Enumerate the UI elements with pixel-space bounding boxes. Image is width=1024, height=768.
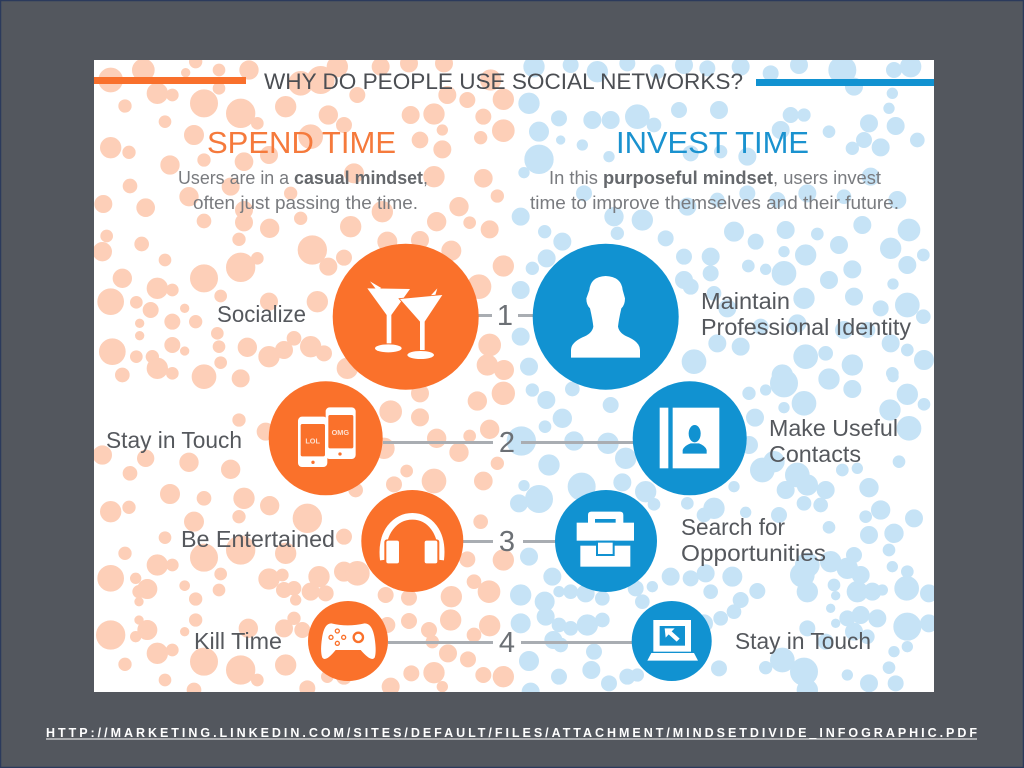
label: search for opportunities: Search for	[681, 514, 785, 540]
number 3: 3	[499, 526, 515, 558]
title: WHY DO PEOPLE USE SOCIAL NETWORKS?	[264, 69, 743, 94]
label: make useful contacts	[769, 415, 898, 467]
label: kill time: Kill Time	[194, 628, 282, 654]
source link: HTTP://MARKETING.LINKEDIN.COM/SITES/DEFAULT/FILES/ATTACHMENT/MINDSETDIVIDE_INFOGRAPHIC.PDF	[46, 726, 977, 740]
text: spend time description: Users are in a casual mindset,	[178, 168, 428, 188]
number 2: 2	[499, 427, 515, 459]
icon: phones	[269, 381, 383, 495]
label: search for opportunities: Opportunities	[681, 540, 826, 566]
icon: headphones	[361, 490, 463, 592]
connector lines	[383, 314, 634, 644]
number 4: 4	[499, 627, 515, 659]
heading: spend time: SPEND TIME	[207, 125, 396, 160]
label: maintain professional identity: Professional Identity	[701, 314, 911, 340]
label: maintain professional identity: Maintain	[701, 288, 790, 314]
infographic panel	[93, 55, 937, 700]
number 1: 1	[497, 300, 513, 332]
label: socialize: Socialize	[217, 301, 306, 327]
orange title rule	[94, 77, 246, 84]
text: spend time description: often just passing the time.	[193, 193, 418, 213]
heading: invest time: INVEST TIME	[616, 125, 809, 160]
label: stay in touch left: Stay in Touch	[106, 427, 242, 453]
label: make useful contacts: Contacts	[769, 441, 861, 467]
label: be entertained: Be Entertained	[181, 526, 335, 552]
text: invest time description	[530, 168, 899, 213]
icon: contacts book	[633, 381, 747, 495]
label: stay in touch right: Stay in Touch	[735, 628, 871, 654]
label: maintain professional identity	[701, 288, 911, 340]
text: spend time description	[178, 168, 428, 213]
label: make useful contacts: Make Useful	[769, 415, 898, 441]
icon: briefcase	[555, 490, 657, 592]
icon: cocktail glasses	[333, 244, 479, 390]
icon: phones: LOL	[305, 437, 321, 446]
icon: laptop	[632, 601, 712, 681]
text: invest time description: time to improve themselves and their future.	[530, 193, 899, 213]
blue title rule	[756, 79, 934, 86]
label: search for opportunities	[681, 514, 826, 566]
icon: person	[533, 244, 679, 390]
icon: game controller	[308, 601, 388, 681]
icon: phones: OMG	[332, 428, 349, 437]
text: invest time description: In this purposeful mindset, users invest	[549, 168, 881, 188]
